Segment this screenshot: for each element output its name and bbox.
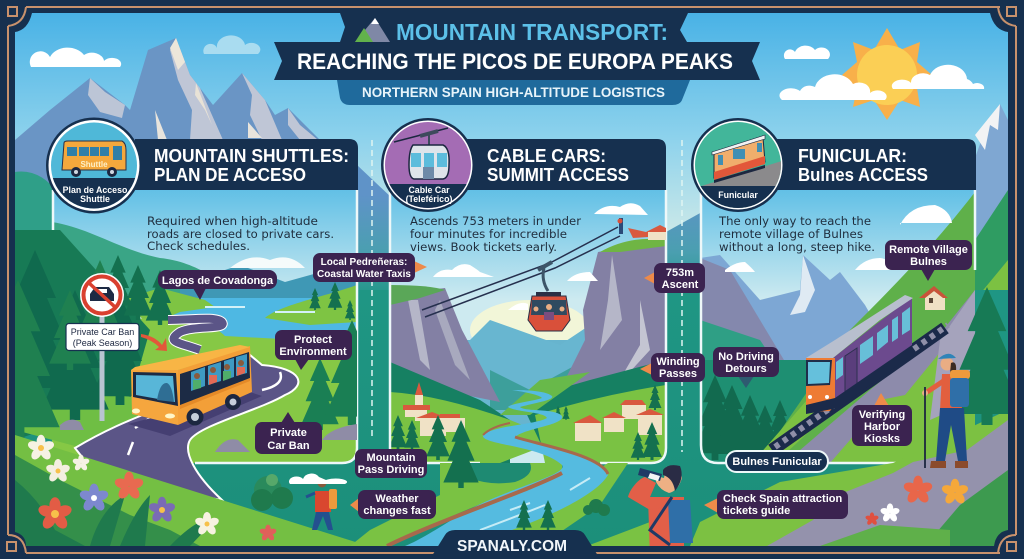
callout: Weather changes fast (350, 490, 436, 519)
river and banks bottom centre (350, 390, 650, 546)
clouds near sun (779, 46, 984, 100)
callout: No Driving Detours (713, 347, 779, 388)
right of panel 1 trees (302, 320, 357, 430)
cloud top centre left (203, 35, 260, 54)
panel 2 header (465, 139, 666, 190)
panel 3 body text: The only way to reach the (718, 214, 871, 228)
callout: Lagos de Covadonga: Lagos de Covadonga (162, 275, 274, 287)
callout: Local Pedreñeras: Coastal Water Taxis (317, 269, 411, 280)
callout: Check Spain attraction tickets guide: tickets guide (723, 505, 790, 517)
bus (128, 345, 262, 436)
panel 1 body text: roads are closed to private cars. (147, 227, 334, 241)
callout: 753m Ascent (644, 263, 705, 293)
mountains top left (15, 38, 400, 300)
icon badge: funicular: Funicular (718, 190, 758, 200)
panel 3 header (775, 139, 976, 190)
callout: Mountain Pass Driving (355, 449, 427, 478)
callout: Private Car Ban (Peak Season) (66, 324, 139, 350)
panel 3 body text: remote village of Bulnes (719, 227, 863, 241)
callout: Winding Passes: Winding (656, 356, 700, 368)
bush by river (583, 499, 610, 516)
callout: Lagos de Covadonga (158, 270, 277, 300)
panel white borders (53, 190, 975, 463)
callout: Private Car Ban (Peak Season): (Peak Season) (73, 338, 132, 348)
cloud near hiker (289, 473, 347, 484)
panel 2 body text (410, 214, 581, 254)
callout: 753m Ascent: Ascent (662, 279, 699, 291)
callout: Verifying Harbor Kiosks: Verifying (859, 409, 905, 421)
sun (842, 28, 932, 120)
callout: Verifying Harbor Kiosks (852, 393, 912, 446)
panel 1 header: MOUNTAIN SHUTTLES: (154, 146, 349, 166)
wildflowers right (865, 476, 969, 526)
panel 1 scene: lake valley (52, 190, 357, 463)
icon badge: shuttle: Shuttle (80, 194, 110, 204)
panel 1 body text (147, 214, 334, 253)
callout: Protect Environment: Environment (279, 346, 347, 358)
panel 2 header: SUMMIT ACCESS (487, 165, 629, 185)
panel 1 body text: Check schedules. (147, 239, 250, 253)
road (75, 319, 298, 500)
panel 1 body text: Required when high-altitude (147, 214, 318, 228)
hiker with trekking pole (922, 354, 970, 468)
icon badge: shuttle: Plan de Acceso (63, 185, 128, 195)
bush near hiker (251, 474, 293, 511)
callout: Check Spain attraction tickets guide: Check Spain attraction (723, 493, 842, 505)
no-car sign (80, 273, 124, 421)
callout: Remote Village Bulnes: Bulnes (910, 256, 947, 268)
meadow bottom left (15, 435, 365, 546)
callout: Remote Village Bulnes (885, 240, 972, 281)
panel 2 header: CABLE CARS: (487, 146, 606, 166)
callout: Verifying Harbor Kiosks: Kiosks (864, 433, 900, 445)
wildflowers left (27, 435, 277, 542)
panel 3 header: Bulnes ACCESS (798, 165, 928, 185)
rocks (60, 420, 357, 452)
panel 2 scene: cable car valley (389, 190, 666, 463)
title banner (274, 13, 760, 105)
panel 2 body text: Ascends 753 meters in under (410, 214, 581, 228)
callout: Winding Passes (640, 353, 705, 382)
tree cluster by lake (309, 282, 355, 320)
panel 2 body text: four minutes for incredible (410, 227, 567, 241)
callout: Bulnes Funicular (726, 451, 828, 472)
cloud top left (30, 48, 121, 67)
callout: Protect Environment (275, 330, 352, 370)
funicular train (806, 295, 913, 414)
callout: Mountain Pass Driving: Mountain (367, 452, 416, 464)
panel 2 body text: views. Book tickets early. (410, 240, 557, 254)
arrow to bus (141, 334, 167, 351)
foreground bottom right slope (690, 410, 1008, 546)
panel 3 body text (718, 214, 875, 254)
icon badge: cable car: Cable Car (408, 185, 450, 195)
callout: Mountain Pass Driving: Pass Driving (358, 464, 424, 476)
panel 3 header: FUNICULAR: (798, 146, 907, 166)
icon badge: shuttle (46, 118, 142, 214)
mid ground strips between panels (15, 165, 1008, 546)
callout: No Driving Detours: Detours (725, 363, 767, 375)
callout: Private Car Ban: Car Ban (267, 440, 310, 452)
panel 3 scene: funicular valley (693, 190, 975, 463)
person hiking small (306, 478, 337, 530)
callout: Protect Environment: Protect (294, 334, 332, 346)
title banner: REACHING THE PICOS DE EUROPA PEAKS (297, 49, 733, 74)
pine tree by river (443, 420, 556, 530)
title banner: MOUNTAIN TRANSPORT: (396, 19, 668, 45)
callout: No Driving Detours: No Driving (718, 351, 774, 363)
house on hill (919, 286, 948, 310)
footer: site name: SPANALY.COM (457, 538, 567, 555)
dashed route lines (372, 140, 682, 452)
callout: Local Pedreñeras: Local Pedreñeras: (321, 257, 407, 268)
forest left (0, 230, 174, 450)
callout: Private Car Ban: Private (270, 427, 307, 439)
panel 3 body text: without a long, steep hike. (719, 240, 875, 254)
clouds in panel 2 (433, 203, 648, 310)
callout: Check Spain attraction tickets guide (704, 490, 848, 519)
callout: Weather changes fast: Weather (375, 493, 419, 505)
right side mountain (960, 104, 1008, 546)
panel 1 header: PLAN DE ACCESO (154, 165, 306, 185)
icon badge: funicular (691, 118, 785, 212)
cable car scene (422, 218, 666, 331)
callout: Winding Passes: Passes (659, 368, 697, 380)
tree right (951, 287, 1023, 425)
icon badge: shuttle: Shuttle (80, 160, 108, 169)
person with binoculars (628, 465, 693, 559)
icon badge: cable car (381, 118, 475, 214)
callout: Local Pedreñeras (313, 253, 427, 282)
callout: Private Car Ban (Peak Season): Private Car Ban (71, 327, 134, 337)
icon badge: cable car: (Teleférico) (406, 194, 452, 204)
callout: 753m Ascent: 753m (666, 267, 694, 279)
title banner: NORTHERN SPAIN HIGH-ALTITUDE LOGISTICS (362, 84, 665, 100)
callout: Private Car Ban (255, 412, 322, 454)
footer: site name (430, 530, 600, 559)
callout: Weather changes fast: changes fast (363, 505, 431, 517)
callout: Bulnes Funicular: Bulnes Funicular (732, 456, 822, 468)
callout: Verifying Harbor Kiosks: Harbor (864, 421, 901, 433)
callout: Remote Village Bulnes: Remote Village (889, 244, 968, 256)
panel 1 header (135, 139, 358, 190)
